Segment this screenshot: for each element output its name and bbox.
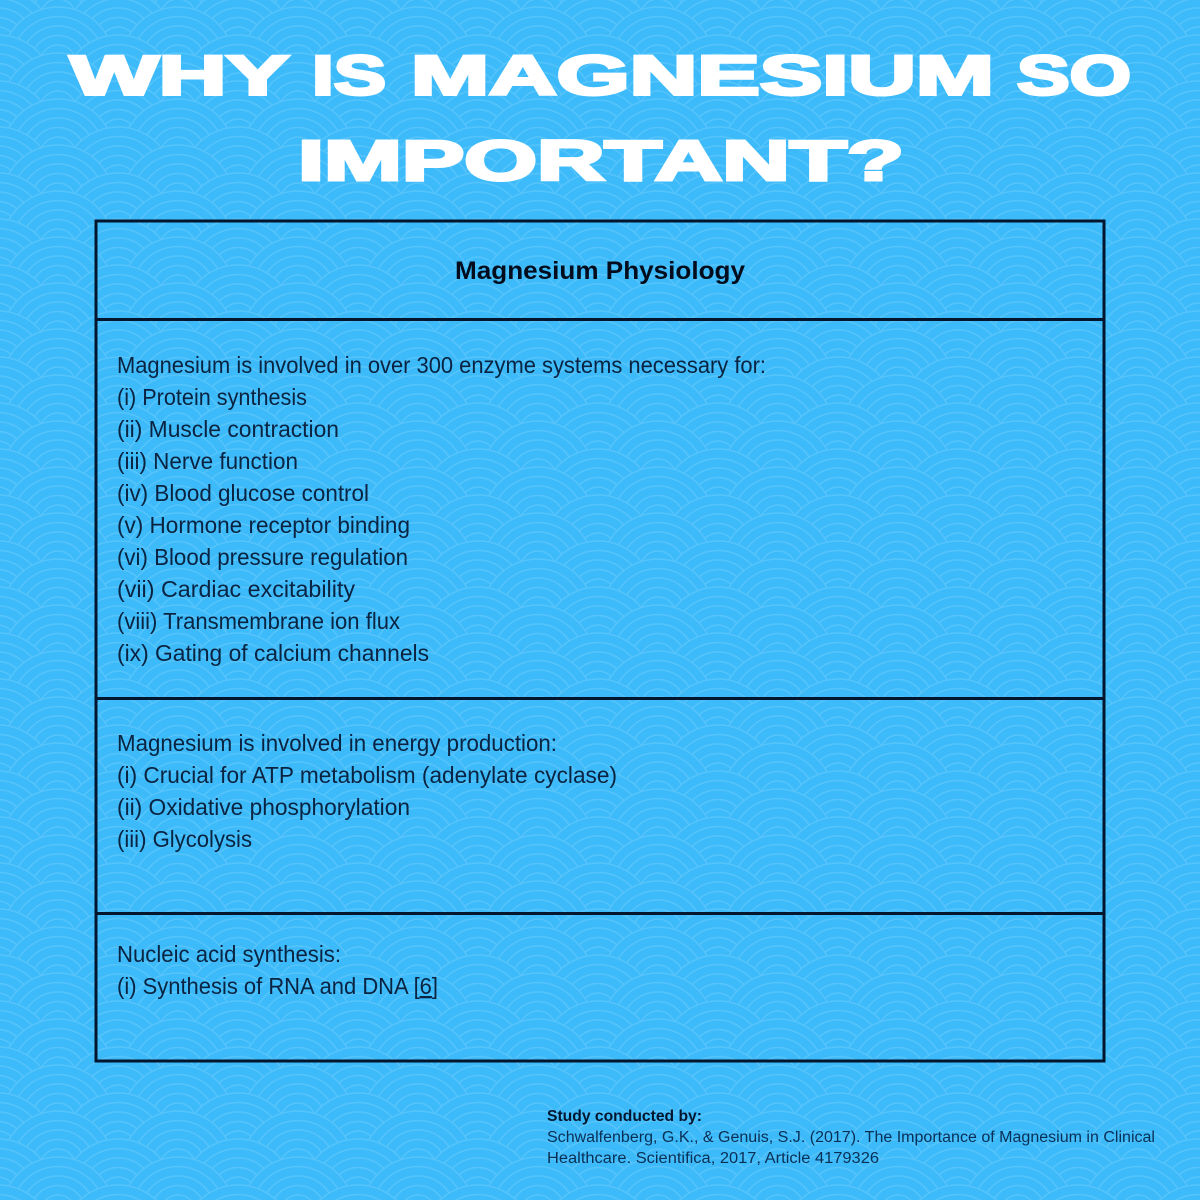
section: enzyme systems	[117, 352, 766, 666]
section: enzyme systems: (viii) Transmembrane ion flux	[117, 608, 400, 634]
section: enzyme systems: (vi) Blood pressure regulation	[117, 544, 408, 570]
section: enzyme systems: (vii) Cardiac excitability	[117, 576, 356, 602]
citation: Study conducted by:	[547, 1108, 702, 1125]
citation	[547, 1108, 1155, 1167]
title: WHY	[70, 44, 289, 106]
section: enzyme systems: (ix) Gating of calcium channels	[117, 640, 429, 666]
section: nucleic acid synthesis: Nucleic acid synthesis:	[117, 941, 341, 967]
citation: Healthcare. Scientifica, 2017, Article 4179326	[547, 1150, 879, 1167]
section: enzyme systems: (iii) Nerve function	[117, 448, 298, 474]
section: nucleic acid synthesis	[117, 941, 438, 999]
title: MAGNESIUM	[411, 44, 994, 106]
title: IS	[312, 44, 386, 106]
section: energy production: (iii) Glycolysis	[117, 826, 252, 852]
section: energy production	[117, 730, 617, 852]
section: enzyme systems: (iv) Blood glucose control	[117, 480, 369, 506]
title: IMPORTANT?	[298, 129, 904, 193]
title: SO	[1017, 44, 1131, 106]
section: energy production: (ii) Oxidative phosphorylation	[117, 794, 410, 820]
section: energy production: (i) Crucial for ATP metabolism (adenylate cyclase)	[117, 762, 617, 788]
table heading: Magnesium Physiology	[455, 257, 745, 285]
title	[70, 44, 1131, 193]
citation: Schwalfenberg, G.K., & Genuis, S.J. (2017). The Importance of Magnesium in Clinical	[547, 1129, 1155, 1146]
section: enzyme systems: Magnesium is involved in over 300 enzyme systems necessary for:	[117, 352, 766, 378]
section: energy production: Magnesium is involved in energy production:	[117, 730, 557, 756]
section: nucleic acid synthesis: (i) Synthesis of RNA and DNA [6]	[117, 973, 438, 999]
table: magnesium physiology	[96, 221, 1104, 1061]
section: enzyme systems: (v) Hormone receptor binding	[117, 512, 410, 538]
section: enzyme systems: (ii) Muscle contraction	[117, 416, 339, 442]
section: enzyme systems: (i) Protein synthesis	[117, 384, 307, 410]
